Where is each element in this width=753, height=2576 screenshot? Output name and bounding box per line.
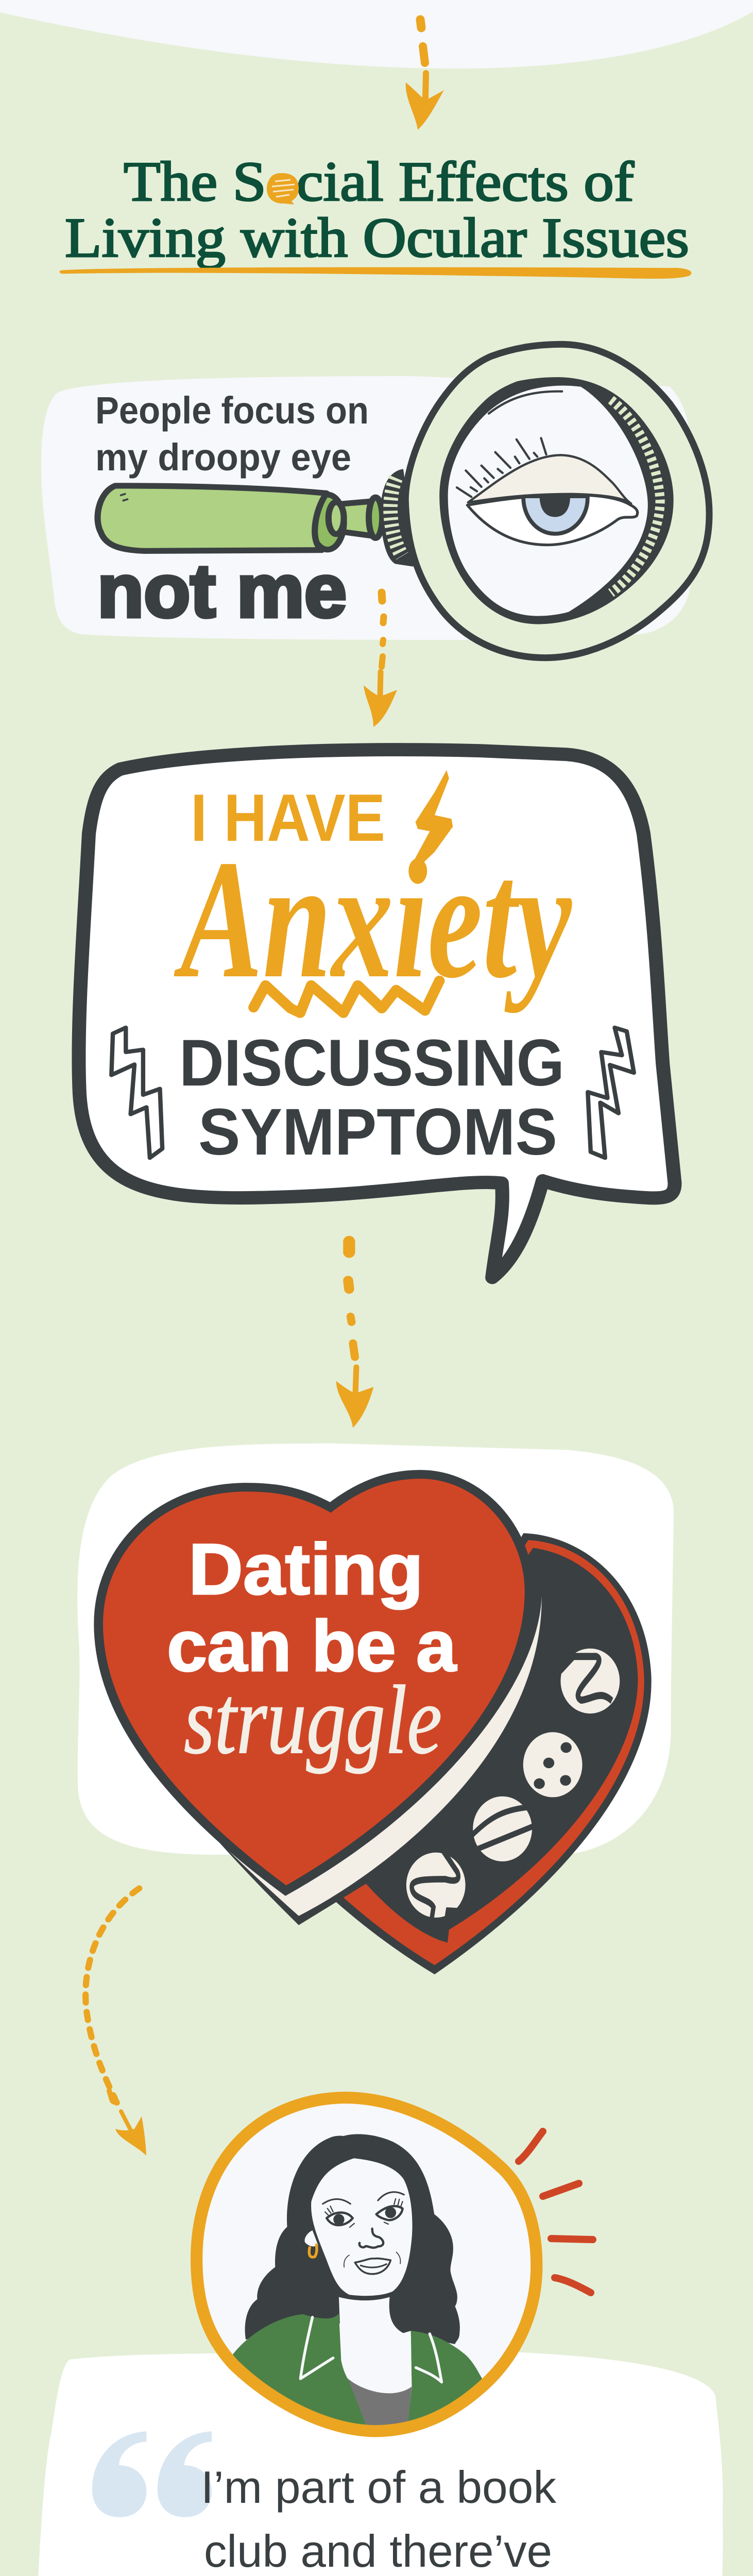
panel: droopy eye (41, 376, 693, 640)
text: discussing symptoms: DISCUSSING (179, 1026, 564, 1100)
text: people focus on my droopy eye: my droopy eye (95, 436, 351, 479)
eye (457, 438, 638, 545)
portrait background (197, 2097, 537, 2431)
text: dating can be a: can be a (167, 1605, 457, 1686)
orange zigzag (253, 981, 439, 1013)
text: discussing symptoms: SYMPTOMS (198, 1095, 557, 1169)
icon: magnifying glass with eye (381, 344, 709, 658)
quote regular lines (201, 2462, 557, 2576)
knurled lens edge (611, 400, 660, 593)
chocolates (406, 1649, 620, 1922)
arrow: curved dashed to portrait (85, 1888, 146, 2156)
text: discussing symptoms (179, 1026, 564, 1169)
icon: heart chocolate box (98, 1475, 652, 1974)
box base (336, 1533, 652, 1974)
outer ring (405, 344, 709, 658)
red spark lines (519, 2131, 593, 2293)
knurled knob (381, 469, 413, 567)
text: Anxiety: Anxiety (173, 825, 573, 1013)
quote regular lines: I’m part of a book (201, 2462, 557, 2513)
chocolate 4 (406, 1850, 466, 1922)
lid edge (163, 1596, 543, 1925)
heart lid (98, 1475, 529, 1891)
quote regular lines: club and there’ve (204, 2526, 552, 2576)
text: dating can be a (167, 1529, 457, 1686)
text: struggle: struggle (184, 1666, 442, 1774)
panel: speech bubble anxiety (79, 750, 675, 1278)
text: people focus on my droopy eye (95, 389, 369, 479)
top white curved section (0, 0, 753, 69)
arrow: dashed from top to title (406, 20, 444, 130)
quote text (142, 2462, 614, 2576)
title line 1: The Social Effects of (124, 150, 635, 213)
title line 2: Living with Ocular Issues (65, 207, 689, 269)
arrow: magnifier to anxiety bubble (364, 592, 397, 727)
lens rim (443, 381, 670, 620)
chocolate 2 (523, 1732, 583, 1797)
title (65, 150, 689, 269)
icon: speech bubble in the letter o (267, 173, 299, 205)
icon: portrait of Courtney (197, 2097, 537, 2432)
bubble outline (79, 750, 675, 1278)
chocolate 1 (560, 1649, 620, 1714)
icon: right outlined bolt (588, 1028, 634, 1158)
icon: magnifier handle (98, 486, 382, 551)
text: not me: not me (97, 549, 347, 633)
icon: left outlined bolt (111, 1028, 162, 1158)
glass (448, 385, 648, 616)
hair, clothes and face (230, 2134, 485, 2432)
chocolate 3 (471, 1797, 534, 1861)
panel: quote speech bubble (33, 2352, 723, 2576)
icon: opening quote marks (92, 2431, 212, 2517)
panel: white blob behind heart (77, 1444, 674, 1855)
text: I have: I HAVE (191, 780, 385, 855)
text: dating can be a: Dating (189, 1529, 423, 1609)
icon: orange lightning bolt (410, 770, 453, 870)
portrait ring (197, 2097, 537, 2431)
text: people focus on my droopy eye: People focus on (95, 389, 369, 432)
arrow: anxiety bubble to dating heart (336, 1242, 373, 1428)
title underline (60, 267, 691, 279)
